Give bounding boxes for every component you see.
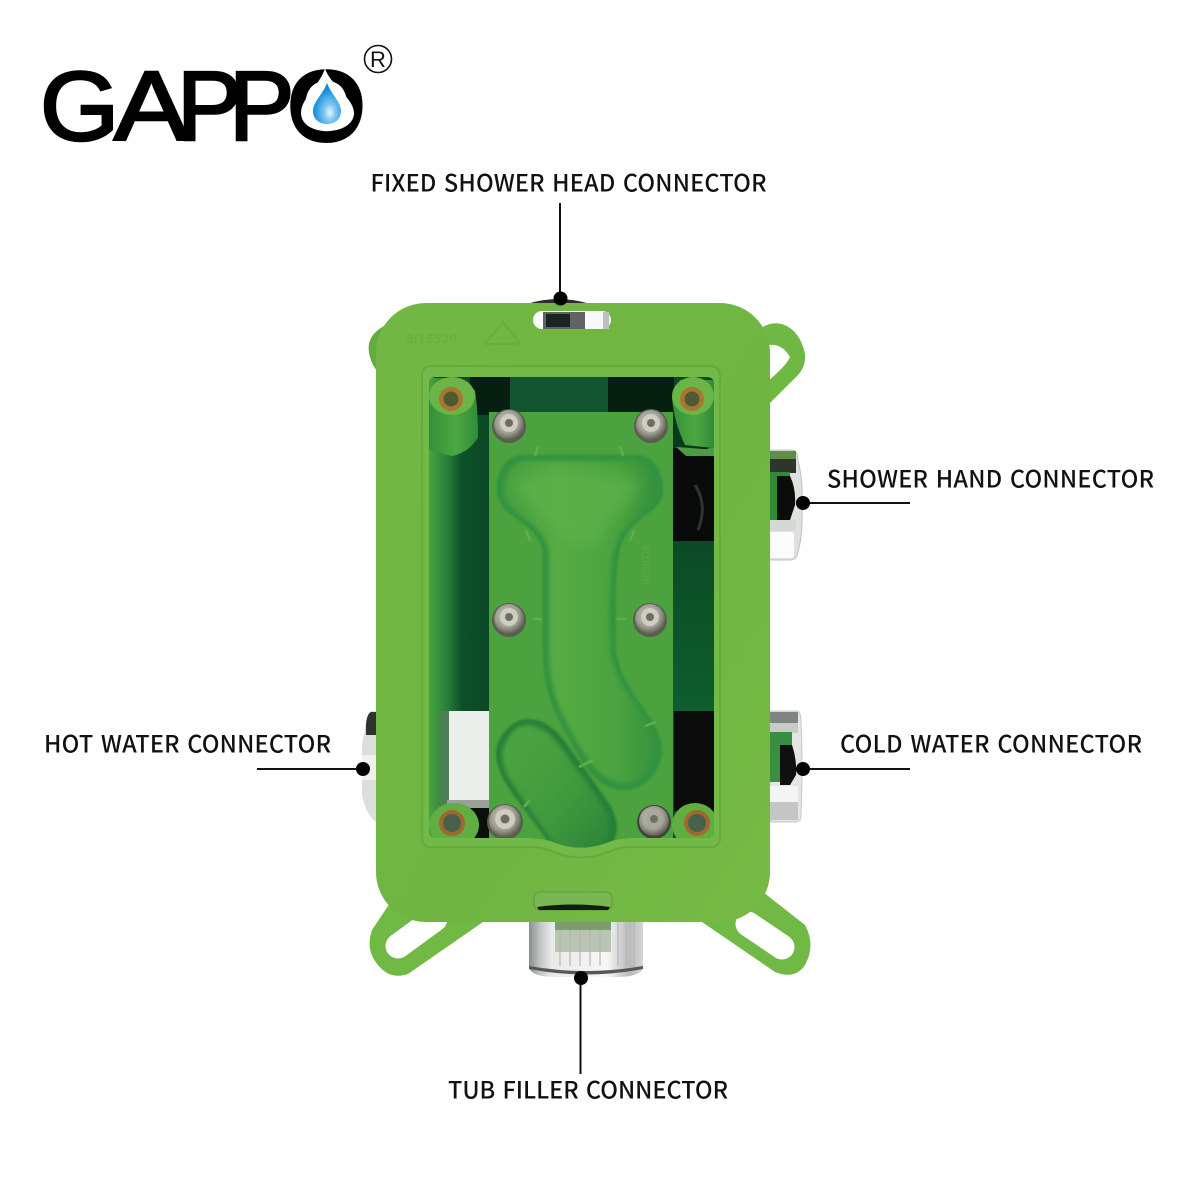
base plate	[489, 412, 673, 852]
label: fixed shower head connector: FIXED SHOWER HEAD CONNECTOR	[370, 164, 766, 198]
frame plate	[376, 303, 770, 922]
right upper black insert	[673, 447, 714, 541]
logo registered mark	[364, 46, 392, 72]
callout: cold water	[796, 762, 910, 776]
callout: shower hand	[796, 496, 910, 510]
bottom-right pillar	[672, 803, 714, 838]
upper dark recess	[470, 377, 510, 415]
mounting ear: top right	[758, 323, 805, 405]
right wall dark	[673, 412, 714, 448]
logo wordmark: O	[286, 49, 367, 165]
channel ribs	[524, 446, 656, 807]
top-right pillar	[672, 377, 714, 448]
logo wordmark: A	[114, 52, 189, 161]
shower hand fitting	[768, 450, 802, 560]
label: shower hand connector: SHOWER HAND CONNECTOR	[827, 460, 1154, 494]
left wall	[429, 378, 462, 838]
top-left pillar	[429, 377, 478, 456]
mounting ear: bottom right	[702, 892, 810, 975]
mounting ear: bottom left	[370, 900, 483, 976]
top back wall	[510, 377, 608, 413]
raised inner rim	[422, 366, 720, 858]
knurled ridges	[560, 922, 634, 966]
logo: GAPPO	[40, 46, 392, 165]
cavity	[429, 377, 718, 852]
moulded pill channel	[496, 719, 617, 852]
logo wordmark: G	[40, 52, 119, 162]
right middle wall	[673, 610, 714, 711]
top slot	[533, 311, 611, 329]
callout: fixed shower head	[554, 203, 568, 306]
channel highlight	[520, 476, 638, 540]
embossed frame marking	[406, 322, 520, 346]
callout: tub filler	[574, 971, 588, 1074]
bottom slot	[534, 892, 612, 910]
cold water fitting	[770, 711, 802, 822]
label: hot water connector: HOT WATER CONNECTOR	[44, 726, 331, 760]
embossed frame marking: 8/16520	[406, 331, 457, 346]
logo wordmark: P	[229, 51, 294, 161]
logo registered mark: R	[370, 47, 386, 72]
logo wordmark	[40, 49, 367, 165]
tub filler fitting	[529, 915, 643, 977]
icon: water drop in logo	[301, 68, 354, 131]
product: green mounting box	[362, 299, 810, 977]
screws	[487, 409, 671, 840]
right lower black insert	[674, 711, 714, 811]
mounting ear: top left	[369, 325, 386, 378]
logo wordmark: P	[177, 51, 242, 161]
bottom-left pillar	[429, 803, 479, 838]
callout: hot water	[257, 762, 370, 776]
hot water fitting	[362, 711, 376, 822]
moulded T-shaped channel	[497, 455, 663, 790]
top outlet fitting behind frame	[527, 299, 590, 304]
left lower chrome insert	[440, 711, 489, 838]
label: cold water connector: COLD WATER CONNECTOR	[840, 726, 1142, 760]
label: tub filler connector: TUB FILLER CONNECTOR	[448, 1072, 728, 1106]
embossed plate marking: 8/16520	[639, 545, 651, 585]
